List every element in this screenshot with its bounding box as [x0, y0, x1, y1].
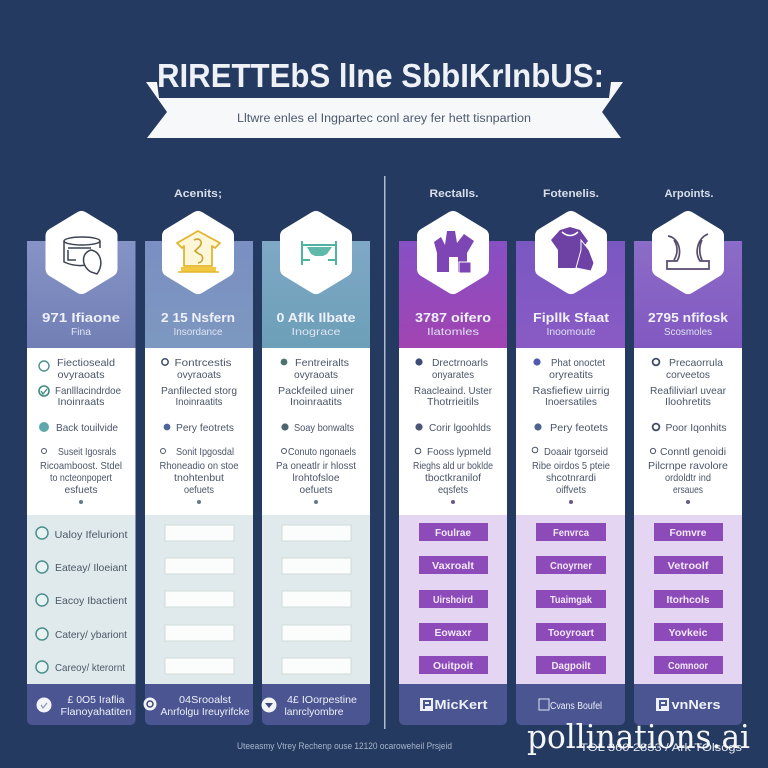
header sub: Insordance: [174, 326, 223, 338]
feature list: Raacleaind. Uster: [414, 385, 492, 397]
heading: Acenits: Acenits;: [174, 188, 222, 200]
feature list: [39, 357, 122, 504]
feature list: ovyraoats: [58, 369, 104, 381]
feature list: Ricoamboost. Stdel: [40, 460, 122, 472]
button rows: Vaxroalt: [432, 560, 475, 572]
header sub: Fina: [71, 326, 91, 338]
feature list: eqsfets: [438, 484, 468, 496]
button rows: Fenvrca: [553, 527, 589, 539]
feature list: Thotrrieitils: [427, 396, 479, 408]
feature list: oryreatits: [549, 369, 593, 381]
watermark: pollinations.ai: [527, 717, 750, 756]
feature list: Rieghs ald ur boklde: [413, 460, 493, 472]
footer: [656, 697, 720, 712]
vertical divider: [384, 176, 386, 729]
footer: Cvans Boufel: [550, 701, 602, 712]
hexagon icon: purple glove: [425, 219, 481, 286]
panel: column 2: [144, 219, 253, 725]
feature list: Fontrcestis: [174, 357, 232, 369]
feature list: lrohtofsloe: [292, 472, 340, 484]
button rows: [654, 523, 723, 674]
heading: Fotenelis: Fotenelis.: [543, 188, 599, 200]
feature list: Pery feotrets: [176, 422, 234, 434]
button rows: Tuaimgak: [550, 594, 592, 606]
feature list: Inoinraats: [58, 396, 104, 408]
feature list: [648, 357, 728, 504]
button rows: Ouitpoit: [433, 660, 473, 672]
header sub: Ilatomles: [427, 326, 479, 338]
feature list: Poor Iqonhits: [666, 422, 726, 434]
header stat: 0 Aflk Ilbate: [276, 310, 355, 325]
feature list: Fiectioseald: [57, 357, 115, 369]
button rows: Tooyroart: [548, 627, 594, 639]
feature list: Fentreiralts: [295, 357, 349, 369]
footer: [144, 694, 250, 718]
contact line: TOL 360 2833 / Ark TOlsogs: [580, 742, 743, 754]
feature list: ordoldtr ind: [665, 472, 711, 484]
feature list: Precaorrula: [669, 357, 723, 369]
button rows: [536, 523, 606, 674]
rating rows: Eacoy Ibactient: [55, 595, 127, 607]
hexagon icon: purple shirt: [543, 219, 599, 286]
feature list: Pilcrnpe ravolore: [648, 460, 728, 472]
feature list: oefuets: [184, 484, 214, 496]
panel: column 5: [516, 219, 625, 725]
feature list: Inoinraatits: [176, 396, 222, 408]
feature list: shcotnrardi: [546, 472, 596, 484]
panel: column 1: [27, 219, 136, 725]
input rows: [282, 525, 351, 674]
feature list: Corir lgoohlds: [429, 422, 491, 434]
ribbon banner with subtitle: [146, 82, 623, 138]
feature list: Drectrnoarls: [432, 357, 488, 369]
feature list: to ncteonpopert: [50, 472, 112, 484]
feature list: Back touilvide: [56, 422, 118, 434]
feature list: oiffvets: [556, 484, 586, 496]
feature list: [413, 357, 493, 504]
feature list: Conntl genoidi: [660, 446, 726, 458]
footer: £ 0O5 Iraflia: [68, 694, 125, 706]
header stat: 2 15 Nsfern: [161, 310, 235, 325]
hexagon icon: teal frame: [288, 219, 344, 286]
feature list: Fooss lypmeld: [427, 446, 491, 458]
footer: [420, 697, 488, 712]
feature list: Fanlllacindrdoe: [55, 385, 121, 397]
button rows: Vetroolf: [668, 560, 709, 572]
feature list: ovyraoats: [294, 369, 338, 381]
input rows: [165, 525, 234, 674]
header stat: 2795 nfifosk: [648, 310, 729, 325]
feature list: Reafiliviarl uvear: [650, 385, 726, 397]
heading: Arpoints: Arpoints.: [664, 188, 714, 200]
footer: 04Srooalst: [179, 694, 231, 706]
rating rows: Ualoy Ifeluriont: [54, 529, 128, 541]
button rows: Dagpoilt: [552, 660, 591, 672]
feature list: oefuets: [300, 484, 332, 496]
heading: Rectalls: Rectalls.: [430, 188, 478, 200]
button rows: Cnoyrner: [550, 560, 592, 572]
feature list: Rasfiefiew uirrig: [532, 385, 610, 397]
footer: [539, 699, 602, 712]
feature list: Panfilected storg: [161, 385, 237, 397]
button rows: Uirshoird: [433, 594, 473, 606]
feature list: Conuto ngonaels: [288, 446, 356, 458]
footer: vnNers: [672, 697, 720, 712]
hexagon icon: horns: [660, 219, 716, 286]
feature list: Iloohretits: [665, 396, 711, 408]
ribbon banner with subtitle: Lltwre enles el Ingpartec conl arey fer hett tisnpartion: [237, 113, 531, 125]
feature list: Pery feotets: [550, 422, 608, 434]
feature list: corveetos: [666, 369, 710, 381]
rating rows: Catery/ ybariont: [55, 629, 127, 641]
feature list: [276, 357, 356, 504]
feature list: ersaues: [673, 484, 703, 496]
feature list: Phat onoctet: [551, 357, 605, 369]
header sub: Inoomoute: [546, 326, 596, 338]
button rows: Comnoor: [668, 660, 708, 672]
feature list: Soay bonwalts: [294, 422, 354, 434]
footer: MicKert: [434, 697, 488, 712]
footer: [36, 694, 132, 718]
feature list: Rhoneadio on stoe: [160, 460, 239, 472]
feature list: [532, 357, 610, 504]
button rows: Eowaxr: [434, 627, 472, 639]
button rows: [419, 523, 488, 674]
hexagon icon: container: [54, 219, 110, 286]
feature list: Suseit Igosrals: [58, 446, 116, 458]
button rows: Fomvre: [670, 527, 707, 539]
header stat: 971 Ifiaone: [42, 310, 120, 325]
footer: Anrfolgu Ireuyrifcke: [160, 706, 250, 718]
title: RIRETTEbS lIne SbbIKrInbUS:: [157, 57, 604, 94]
panel: column 4: [399, 219, 507, 725]
hexagon icon: gold house: [170, 219, 226, 286]
feature list: onyarates: [432, 369, 474, 381]
button rows: Itorhcols: [666, 594, 710, 606]
rating rows: [36, 527, 128, 674]
feature list: Packfeiled uiner: [278, 385, 355, 397]
footer: 4£ IOorpestine: [287, 694, 357, 706]
header sub: Scosmoles: [664, 326, 712, 338]
feature list: Inoersatiles: [545, 396, 597, 408]
button rows: Foulrae: [435, 527, 471, 539]
rating rows: Eateay/ Iloeiant: [55, 562, 127, 574]
feature list: Pa oneatlr ir hlosst: [276, 460, 356, 472]
panel: column 3: [262, 219, 370, 725]
rating rows: Careoy/ kterornt: [55, 662, 125, 674]
feature list: esfuets: [64, 484, 98, 496]
feature list: Doaair tgorseid: [544, 446, 608, 458]
panel: column 6: [634, 219, 742, 725]
footer: lanrclyombre: [284, 706, 344, 718]
header stat: 3787 oifero: [415, 310, 491, 325]
header sub: Inograce: [292, 326, 341, 338]
feature list: tnohtenbut: [174, 472, 224, 484]
feature list: [160, 357, 239, 504]
feature list: Sonit Ipgosdal: [176, 446, 234, 458]
button rows: Yovkeic: [668, 627, 708, 639]
feature list: ovyraoats: [177, 369, 221, 381]
feature list: tboctkranilof: [425, 472, 481, 484]
feature list: Ribe oirdos 5 pteie: [532, 460, 610, 472]
feature list: Inoinraatits: [290, 396, 342, 408]
footnote: Uteeasmy Vtrey Rechenp ouse 12120 ocaroweheil Prsjeid: [237, 741, 452, 752]
footer: Flanoyahatiten: [60, 706, 132, 718]
footer: [262, 694, 357, 718]
header stat: Fipllk Sfaat: [533, 310, 610, 325]
